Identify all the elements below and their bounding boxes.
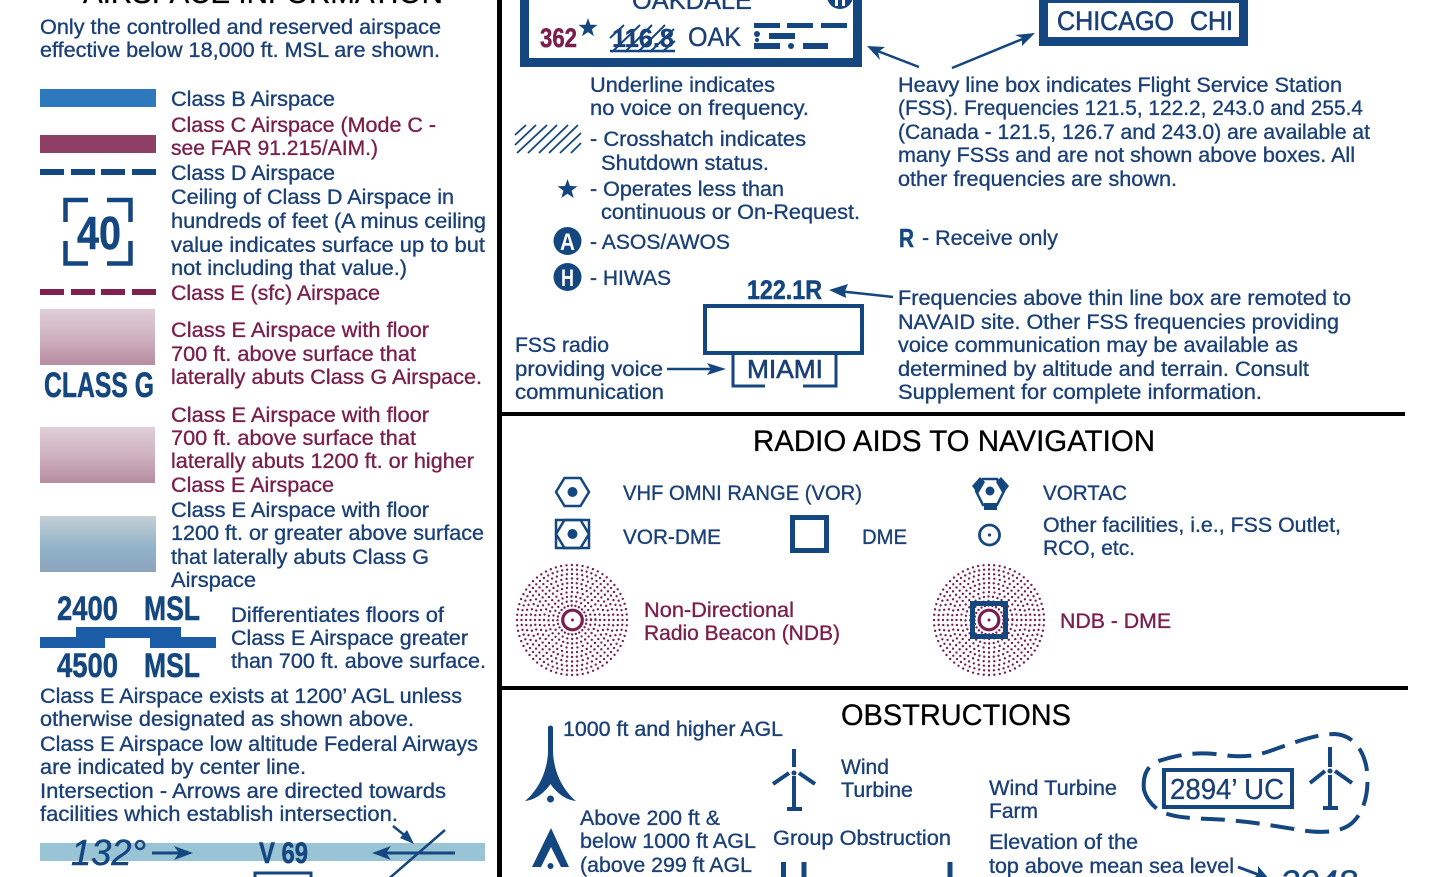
icon: group obstruction towers [784, 862, 950, 877]
text: thin line box note: NAVAID site. Other FSS frequencies providing [898, 311, 1339, 334]
arrow: to elevation value [1238, 866, 1270, 877]
diagram: Oakdale NAVAID box: 362 [540, 23, 577, 53]
label: class D ceiling: value indicates surface up to but [171, 234, 485, 257]
intro text: Only the controlled and reserved airspace [40, 16, 441, 39]
label: elevation note [989, 831, 1234, 877]
diagram: Chicago FSS box: CHICAGO [1057, 6, 1174, 36]
diagram: Oakdale NAVAID box: OAK [688, 22, 741, 52]
icon: MSL floor differentiator: 4500 [57, 647, 118, 685]
label: NDB [644, 599, 840, 645]
panel: radio aids to navigation [517, 425, 1341, 675]
icon: class D ceiling 40: 40 [77, 207, 121, 259]
diagram: thin line box with Miami [705, 306, 862, 386]
icon: MSL floor differentiator [40, 590, 216, 685]
text: thin line box note: Frequencies above thin line box are remoted to [898, 287, 1351, 310]
text: FSS radio note [515, 334, 664, 404]
icon: NDB-DME [934, 565, 1044, 675]
label: ASOS/AWOS: - ASOS/AWOS [590, 231, 730, 254]
label: VORTAC: VORTAC [1043, 482, 1127, 505]
text: underline note: no voice on frequency. [590, 97, 809, 120]
icon: NDB [517, 565, 627, 675]
text: heavy line box note: (FSS). Frequencies 121.5, 122.2, 243.0 and 255.4 [898, 97, 1363, 120]
label: class D ceiling: Ceiling of Class D Airspace in [171, 186, 454, 209]
label: elevation note: Elevation of the [989, 831, 1138, 854]
icon: VOR-DME [556, 520, 589, 548]
panel: frequency and NAVAID box [515, 0, 1370, 404]
text: class E 700 ft abutting 1200 ft: laterally abuts 1200 ft. or higher [171, 450, 474, 473]
label: wind turbine [841, 756, 913, 802]
intro text: effective below 18,000 ft. MSL are shown. [40, 39, 440, 62]
label: wind turbine: Wind [841, 756, 889, 779]
text: class E notes: Class E Airspace low altitude Federal Airways [40, 733, 478, 756]
label: wind turbine: Turbine [841, 779, 913, 802]
text: class E 700 ft abutting 1200 ft: Class E Airspace [171, 474, 334, 497]
diagram: wind turbine farm outline: 2894’ UC [1170, 774, 1284, 806]
chart: airway with intersection: V 69 [259, 837, 308, 870]
label: other facilities: Other facilities, i.e., FSS Outlet, [1043, 514, 1341, 537]
text: crosshatch note: - Crosshatch indicates [590, 128, 806, 151]
text: class E 700 ft abutting class G: Class E Airspace with floor [171, 319, 429, 342]
text: FSS radio note: providing voice [515, 358, 663, 381]
label: class C: see FAR 91.215/AIM.) [171, 137, 378, 160]
label: above 200 ft: below 1000 ft AGL [580, 830, 756, 853]
diagram: Oakdale NAVAID box [524, 0, 858, 62]
label: above 200 ft: Above 200 ft & [580, 807, 720, 830]
arrow: to 122.1R [829, 284, 893, 298]
icon: star [558, 179, 578, 198]
arrow: to NAVAID box [867, 46, 919, 67]
icon: crosshatch [515, 125, 581, 153]
label: above 200 ft [580, 807, 756, 877]
text: class E 700 ft abutting class G: 700 ft. above surface that [171, 343, 416, 366]
label: group obstruction: Group Obstruction [773, 827, 951, 850]
text: floors differentiator: Class E Airspace greater [231, 627, 468, 650]
heading: radio aids to navigation: RADIO AIDS TO NAVIGATION [753, 425, 1155, 458]
icon: MSL floor differentiator: MSL [144, 647, 200, 685]
text: star note: - Operates less than [590, 178, 784, 201]
text: class E notes: facilities which establish intersection. [40, 803, 398, 826]
text: class E 700 ft abutting 1200 ft: Class E Airspace with floor [171, 404, 429, 427]
chart: airway with intersection [40, 826, 485, 877]
label: other facilities [1043, 514, 1341, 560]
text: class E notes: Class E Airspace exists at 1200’ AGL unless [40, 685, 462, 708]
swatch: class E 700 ft, class G [40, 309, 155, 365]
text: FSS radio note: FSS radio [515, 334, 609, 357]
label: class C: Class C Airspace (Mode C - [171, 114, 436, 137]
text: class E 1200 ft: Class E Airspace with floor [171, 499, 429, 522]
text: heavy line box note: many FSSs and are not shown above boxes. All [898, 144, 1355, 167]
text: FSS radio note: communication [515, 381, 664, 404]
label: NDB-DME: NDB - DME [1060, 610, 1171, 633]
diagram: Oakdale NAVAID box: 116.8 [612, 23, 674, 53]
text: class E notes: are indicated by center line. [40, 756, 306, 779]
text: star note: continuous or On-Request. [601, 201, 860, 224]
label: class D ceiling: hundreds of feet (A minus ceiling [171, 210, 486, 233]
label: NDB: Non-Directional [644, 599, 794, 622]
label: 1000 ft and higher: 1000 ft and higher AGL [563, 718, 783, 741]
icon: DME [792, 518, 826, 550]
text: thin line box note: Supplement for complete information. [898, 381, 1262, 404]
icon: VOR [556, 478, 589, 506]
icon: HIWAS circle [554, 263, 582, 292]
chart: airway with intersection: 132° [71, 832, 146, 873]
swatch: class D dashed line [40, 169, 156, 175]
text: class E notes: Intersection - Arrows are directed towards [40, 780, 446, 803]
icon: MSL floor differentiator: 2400 [57, 590, 118, 628]
swatch: class E sfc dashed line [40, 289, 156, 295]
label: class B: Class B Airspace [171, 88, 335, 111]
text: class E notes [40, 685, 478, 826]
text: class E 700 ft abutting class G [171, 319, 482, 389]
text: class E 700 ft abutting 1200 ft [171, 404, 474, 497]
text: thin line box note: determined by altitude and terrain. Consult [898, 358, 1309, 381]
arrow: to Miami [667, 363, 726, 375]
diagram: Chicago FSS box [1044, 0, 1244, 42]
text: crosshatch note: Shutdown status. [601, 152, 769, 175]
text: thin line box note [898, 287, 1351, 404]
text: floors differentiator [231, 604, 486, 673]
diagram: wind turbine farm outline [1144, 734, 1368, 832]
text: receive only [899, 223, 1059, 253]
icon: tall tower [525, 726, 576, 802]
label: above 200 ft: (above 299 ft AGL [580, 854, 752, 877]
panel: airspace information [40, 0, 486, 877]
text: class E 1200 ft: Airspace [171, 569, 256, 592]
label: class C [171, 114, 436, 160]
label: class E sfc: Class E (sfc) Airspace [171, 282, 380, 305]
icon: MSL floor differentiator: MSL [144, 590, 200, 628]
text: crosshatch note [590, 128, 806, 175]
swatch: class E 1200 ft [40, 516, 156, 572]
label: class D ceiling [171, 186, 486, 280]
swatch: class E 700 ft, 1200 ft [40, 427, 155, 483]
text: class E 1200 ft [171, 499, 484, 592]
label: class G: CLASS G [44, 366, 154, 405]
icon: HIWAS circle: H [561, 265, 574, 292]
text: class E 1200 ft: 1200 ft. or greater above surface [171, 522, 484, 545]
text: class E 700 ft abutting 1200 ft: 700 ft. above surface that [171, 427, 416, 450]
text: class E 1200 ft: that laterally abuts Class G [171, 546, 429, 569]
text: receive only: - Receive only [922, 227, 1059, 250]
text: thin line box note: voice communication may be available as [898, 334, 1298, 357]
text: heavy line box note: other frequencies are shown. [898, 168, 1177, 191]
label: HIWAS: - HIWAS [590, 267, 671, 290]
label: class D ceiling: not including that value.) [171, 257, 407, 280]
text: star note [590, 178, 860, 224]
label: DME: DME [862, 526, 907, 549]
icon: class D ceiling 40 [66, 200, 130, 264]
text: heavy line box note: Heavy line box indicates Flight Service Station [898, 74, 1342, 97]
diagram: Chicago FSS box: CHI [1190, 6, 1233, 36]
diagram: thin line box with Miami: MIAMI [747, 354, 823, 384]
label: NDB: Radio Beacon (NDB) [644, 622, 840, 645]
text: floors differentiator: Differentiates floors of [231, 604, 444, 627]
swatch: class B [40, 89, 156, 107]
label: other facilities: RCO, etc. [1043, 537, 1135, 560]
label: VOR: VHF OMNI RANGE (VOR) [623, 482, 862, 505]
text: underline note: Underline indicates [590, 74, 775, 97]
icon: ASOS/AWOS circle [554, 227, 582, 256]
text: underline note [590, 74, 809, 120]
heading: obstructions: OBSTRUCTIONS [841, 699, 1071, 732]
label: wind turbine farm: Farm [989, 800, 1038, 823]
label: VOR-DME: VOR-DME [623, 526, 721, 549]
swatch: class C [40, 135, 156, 153]
icon: ASOS/AWOS circle: A [560, 229, 575, 256]
label: class D: Class D Airspace [171, 162, 335, 185]
text: floors differentiator: than 700 ft. above surface. [231, 650, 486, 673]
intro text [40, 16, 441, 62]
text: receive only: R [899, 223, 914, 253]
icon: short tower [532, 828, 569, 869]
text: class E 700 ft abutting class G: laterally abuts Class G Airspace. [171, 366, 482, 389]
text: heavy line box note: (Canada - 121.5, 126.7 and 243.0) are available at [898, 121, 1370, 144]
arrow: to Chicago box [952, 33, 1035, 68]
icon: VORTAC [972, 477, 1009, 510]
label: wind turbine farm [989, 777, 1117, 823]
icon: other facilities [980, 525, 1000, 545]
label: 122.1R: 122.1R [747, 275, 822, 305]
text: heavy line box note [898, 74, 1370, 191]
panel: obstructions [525, 699, 1368, 877]
label: wind turbine farm: Wind Turbine [989, 777, 1117, 800]
text: class E notes: otherwise designated as shown above. [40, 708, 414, 731]
icon: wind turbine [773, 749, 815, 811]
